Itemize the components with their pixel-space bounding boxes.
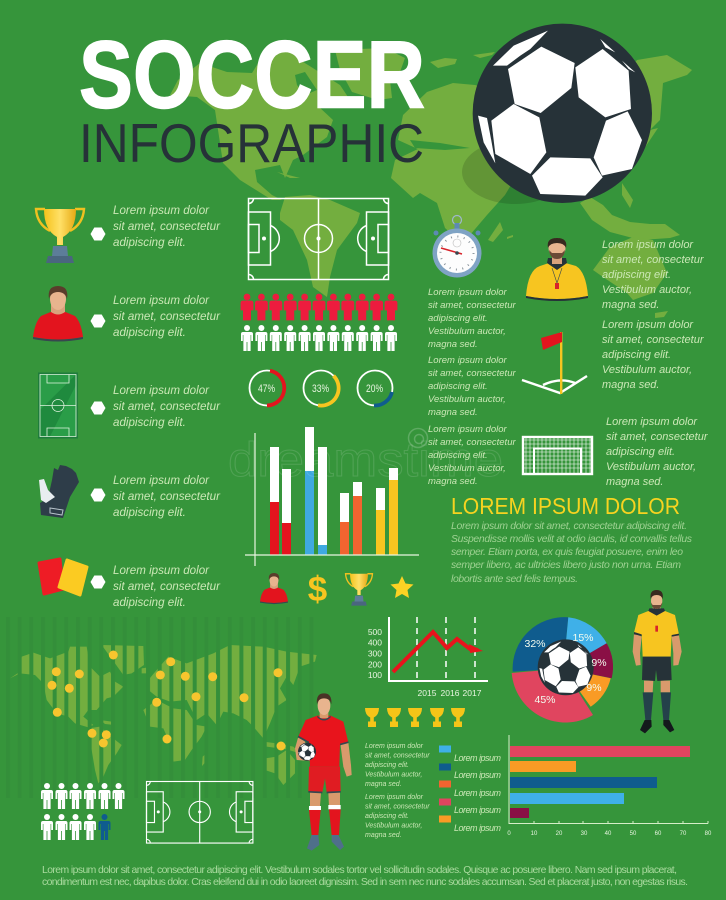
text block 1: Lorem ipsum dolor xyxy=(113,204,210,217)
y axis labels xyxy=(368,627,382,680)
panel: left icon list xyxy=(33,204,221,609)
y axis labels: 300 xyxy=(368,648,382,658)
text: column B: adipiscing elit. xyxy=(602,349,671,361)
chart icon row xyxy=(260,570,414,609)
text: column A: Lorem ipsum dolor xyxy=(428,287,508,298)
text blocks beside legend: sit amet, consectetur xyxy=(365,752,430,760)
pie labels: 45% xyxy=(534,694,556,706)
text: column B: Vestibulum auctor, xyxy=(602,284,692,296)
axis labels: 10 xyxy=(531,831,538,837)
pictogram: people row xyxy=(41,783,124,840)
trend line xyxy=(393,632,478,672)
legend labels: Lorem ipsum xyxy=(454,753,502,763)
text: column B: adipiscing elit. xyxy=(602,269,671,281)
text: column B: sit amet, consectetur xyxy=(602,254,705,266)
text: column C: sit amet, consectetur xyxy=(606,431,709,443)
icon: corner flag xyxy=(522,332,587,394)
title: INFOGRAPHIC: INFOGRAPHIC xyxy=(79,112,424,174)
pie labels: 9% xyxy=(586,682,602,694)
y axis labels: 400 xyxy=(368,638,382,648)
Southeast Asia xyxy=(580,183,680,240)
illustration: player in red xyxy=(295,693,352,851)
text: column A: magna sed. xyxy=(428,476,478,487)
pie labels: 9% xyxy=(591,657,607,669)
Asia xyxy=(620,55,692,152)
text blocks beside legend: sit amet, consectetur xyxy=(365,804,430,810)
text blocks beside legend: adipiscing elit. xyxy=(365,813,409,820)
Greenland xyxy=(335,48,405,100)
icon: gold trophy xyxy=(36,209,84,263)
text block 2: adipiscing elit. xyxy=(113,326,186,339)
text: column B: sit amet, consectetur xyxy=(602,334,705,346)
text blocks beside legend: magna sed. xyxy=(365,832,402,839)
panel: right text column xyxy=(428,216,709,488)
text: column B: Vestibulum auctor, xyxy=(602,364,692,376)
paragraph: Suspendisse mollis velit at odio iaculis, id convallis tellus xyxy=(451,534,692,545)
pie labels: 32% xyxy=(524,638,546,650)
axes xyxy=(509,735,708,824)
segment 45% xyxy=(512,668,593,723)
Europe xyxy=(398,83,520,152)
segment 32% xyxy=(513,617,568,672)
text: column C: Lorem ipsum dolor xyxy=(606,416,698,428)
paragraph: semper libero, ac ultricies libero justo non urna. Etiam xyxy=(451,560,681,571)
text: column A: sit amet, consectetur xyxy=(428,368,516,379)
icon: player bust xyxy=(33,286,83,342)
axis labels: 80 xyxy=(705,831,712,837)
Australia xyxy=(593,237,667,300)
icon: dollar: $ xyxy=(308,570,327,609)
ball xyxy=(538,639,594,695)
axis labels: 30 xyxy=(581,831,588,837)
x axis labels xyxy=(418,688,482,698)
text block 2: Lorem ipsum dolor xyxy=(113,294,210,307)
icon: referee bust xyxy=(526,238,588,301)
donut 33%: 33% xyxy=(312,383,329,395)
text: column B: magna sed. xyxy=(602,299,659,311)
small football pitch xyxy=(146,782,253,843)
x axis labels: 2016 xyxy=(441,688,460,698)
text block 1: adipiscing elit. xyxy=(113,236,186,249)
icon: football field xyxy=(38,372,78,438)
illustration: referee xyxy=(633,590,682,733)
footer text: condimentum est nec, dapibus dolor. Cras eleifend dui in odio laoreet dignissim. Sed in sem nec nunc sodales accumsan. Sed et placerat justo, non egestas risus. xyxy=(42,877,688,888)
text: column A: Vestibulum auctor, xyxy=(428,394,506,405)
Madagascar xyxy=(488,222,503,242)
pie labels xyxy=(524,632,607,706)
icon: trophy xyxy=(346,574,372,606)
text: column A: adipiscing elit. xyxy=(428,450,488,461)
segment 15% xyxy=(564,617,607,668)
text: column A: magna sed. xyxy=(428,339,478,350)
text: column A: adipiscing elit. xyxy=(428,313,488,324)
soccer ball shadow xyxy=(462,140,568,204)
y axis labels: 100 xyxy=(368,670,382,680)
text: column B: Lorem ipsum dolor xyxy=(602,319,694,331)
row of small trophies xyxy=(365,708,465,727)
y axis labels: 200 xyxy=(368,660,382,670)
icon: player xyxy=(260,573,288,604)
legend labels: Lorem ipsum xyxy=(454,788,502,798)
text: column C: adipiscing elit. xyxy=(606,446,675,458)
text blocks beside legend: magna sed. xyxy=(365,781,402,788)
text: column B: magna sed. xyxy=(602,379,659,391)
text block 4: sit amet, consectetur xyxy=(113,490,221,503)
text block 4: Lorem ipsum dolor xyxy=(113,474,210,487)
axis labels xyxy=(507,831,712,837)
text blocks beside legend: Vestibulum auctor, xyxy=(365,822,422,830)
donut 33% xyxy=(304,370,339,406)
islands north atlantic xyxy=(430,52,668,318)
text: column A: sit amet, consectetur xyxy=(428,300,516,311)
axis labels: 70 xyxy=(680,831,687,837)
text block 3: sit amet, consectetur xyxy=(113,400,221,413)
text block 5: Lorem ipsum dolor xyxy=(113,564,210,577)
x axis labels: 2017 xyxy=(463,688,482,698)
text block 3: Lorem ipsum dolor xyxy=(113,384,210,397)
paragraph: semper. Etiam porta, ex quis feugiat posuere, enim leo xyxy=(451,547,683,558)
line chart xyxy=(368,617,488,698)
bullet xyxy=(90,314,106,328)
text: column A: Lorem ipsum dolor xyxy=(428,355,508,366)
arrowhead xyxy=(469,644,483,653)
text block 1: sit amet, consectetur xyxy=(113,220,221,233)
bullet xyxy=(90,488,106,502)
icon: goalkeeper glove xyxy=(39,465,79,518)
bullet xyxy=(90,228,106,240)
striped world map panel xyxy=(5,617,321,798)
text: column B: Lorem ipsum dolor xyxy=(602,239,694,251)
Hudson bay and seas xyxy=(295,72,470,150)
football pitch diagram xyxy=(248,198,388,280)
text block 3: adipiscing elit. xyxy=(113,416,186,429)
vertical stripes xyxy=(5,617,321,798)
Caribbean xyxy=(277,172,300,178)
world map background xyxy=(170,48,692,318)
bullet xyxy=(90,576,106,588)
text: column A: magna sed. xyxy=(428,407,478,418)
legend labels: Lorem ipsum xyxy=(454,823,502,833)
North America xyxy=(170,50,350,200)
text: column C: magna sed. xyxy=(606,476,663,488)
y axis labels: 500 xyxy=(368,627,382,637)
bullet xyxy=(90,402,106,414)
text blocks beside legend: Lorem ipsum dolor xyxy=(365,743,424,750)
watermark: dreamstime xyxy=(228,434,503,487)
axis labels: 40 xyxy=(605,831,612,837)
axis labels: 20 xyxy=(556,831,563,837)
segment 9% maroon xyxy=(564,643,613,678)
legend labels: Lorem ipsum xyxy=(454,770,502,780)
legend labels: Lorem ipsum xyxy=(454,805,502,815)
text blocks beside legend: Vestibulum auctor, xyxy=(365,772,422,778)
axis labels: 60 xyxy=(655,831,662,837)
donut 20% xyxy=(358,370,392,406)
heading: lorem ipsum dolor: LOREM IPSUM DOLOR xyxy=(451,493,680,519)
striped world map xyxy=(10,645,317,785)
donut charts xyxy=(250,370,392,406)
text blocks beside legend: adipiscing elit. xyxy=(365,762,409,769)
donut 47%: 47% xyxy=(258,383,275,395)
pictogram: team of players xyxy=(241,294,397,351)
legend swatches xyxy=(439,746,451,822)
x axis labels: 2015 xyxy=(418,688,437,698)
title xyxy=(79,22,425,174)
text block 4: adipiscing elit. xyxy=(113,506,186,519)
axes xyxy=(389,617,488,681)
text block 5: adipiscing elit. xyxy=(113,596,186,609)
donut 20%: 20% xyxy=(366,383,383,395)
text: column A: sit amet, consectetur xyxy=(428,437,516,448)
icon: goal xyxy=(522,436,593,474)
pie chart with ball xyxy=(512,617,613,723)
text block 5: sit amet, consectetur xyxy=(113,580,221,593)
footer text: Lorem ipsum dolor sit amet, consectetur adipiscing elit. Vestibulum sodales tortor vel sollicitudin sodales. Quisque ac posuere libero. Nam sed ipsum placerat, xyxy=(42,865,677,876)
text: column A: Vestibulum auctor, xyxy=(428,463,506,474)
text: column A: adipiscing elit. xyxy=(428,381,488,392)
paragraph: lobortis ante sed felis tempus. xyxy=(451,574,578,585)
bars xyxy=(510,746,690,818)
icon: big soccer ball xyxy=(473,24,652,203)
bar chart xyxy=(245,427,419,566)
icon: star xyxy=(390,576,414,598)
title: SOCCER: SOCCER xyxy=(79,22,425,128)
icon: red and yellow cards xyxy=(39,559,87,595)
donut 47% xyxy=(250,370,284,406)
text blocks beside legend: Lorem ipsum dolor xyxy=(365,794,424,801)
South America xyxy=(280,195,360,297)
axis labels: 50 xyxy=(630,831,637,837)
gridlines xyxy=(417,617,475,678)
pie labels: 15% xyxy=(572,632,594,644)
axis labels: 0 xyxy=(507,831,511,837)
icon: stopwatch xyxy=(432,216,482,278)
Africa xyxy=(391,148,520,237)
icon: ball held by player xyxy=(298,743,316,761)
watermark spiral xyxy=(408,428,428,448)
segment 9% orange xyxy=(564,668,611,707)
paragraph: Lorem ipsum dolor sit amet, consectetur adipiscing elit. xyxy=(451,521,687,532)
horizontal bar chart xyxy=(507,735,712,837)
text: column A: Vestibulum auctor, xyxy=(428,326,506,337)
map location dots xyxy=(48,650,286,750)
text: column C: Vestibulum auctor, xyxy=(606,461,696,473)
text: column A: Lorem ipsum dolor xyxy=(428,424,508,435)
text block 2: sit amet, consectetur xyxy=(113,310,221,323)
